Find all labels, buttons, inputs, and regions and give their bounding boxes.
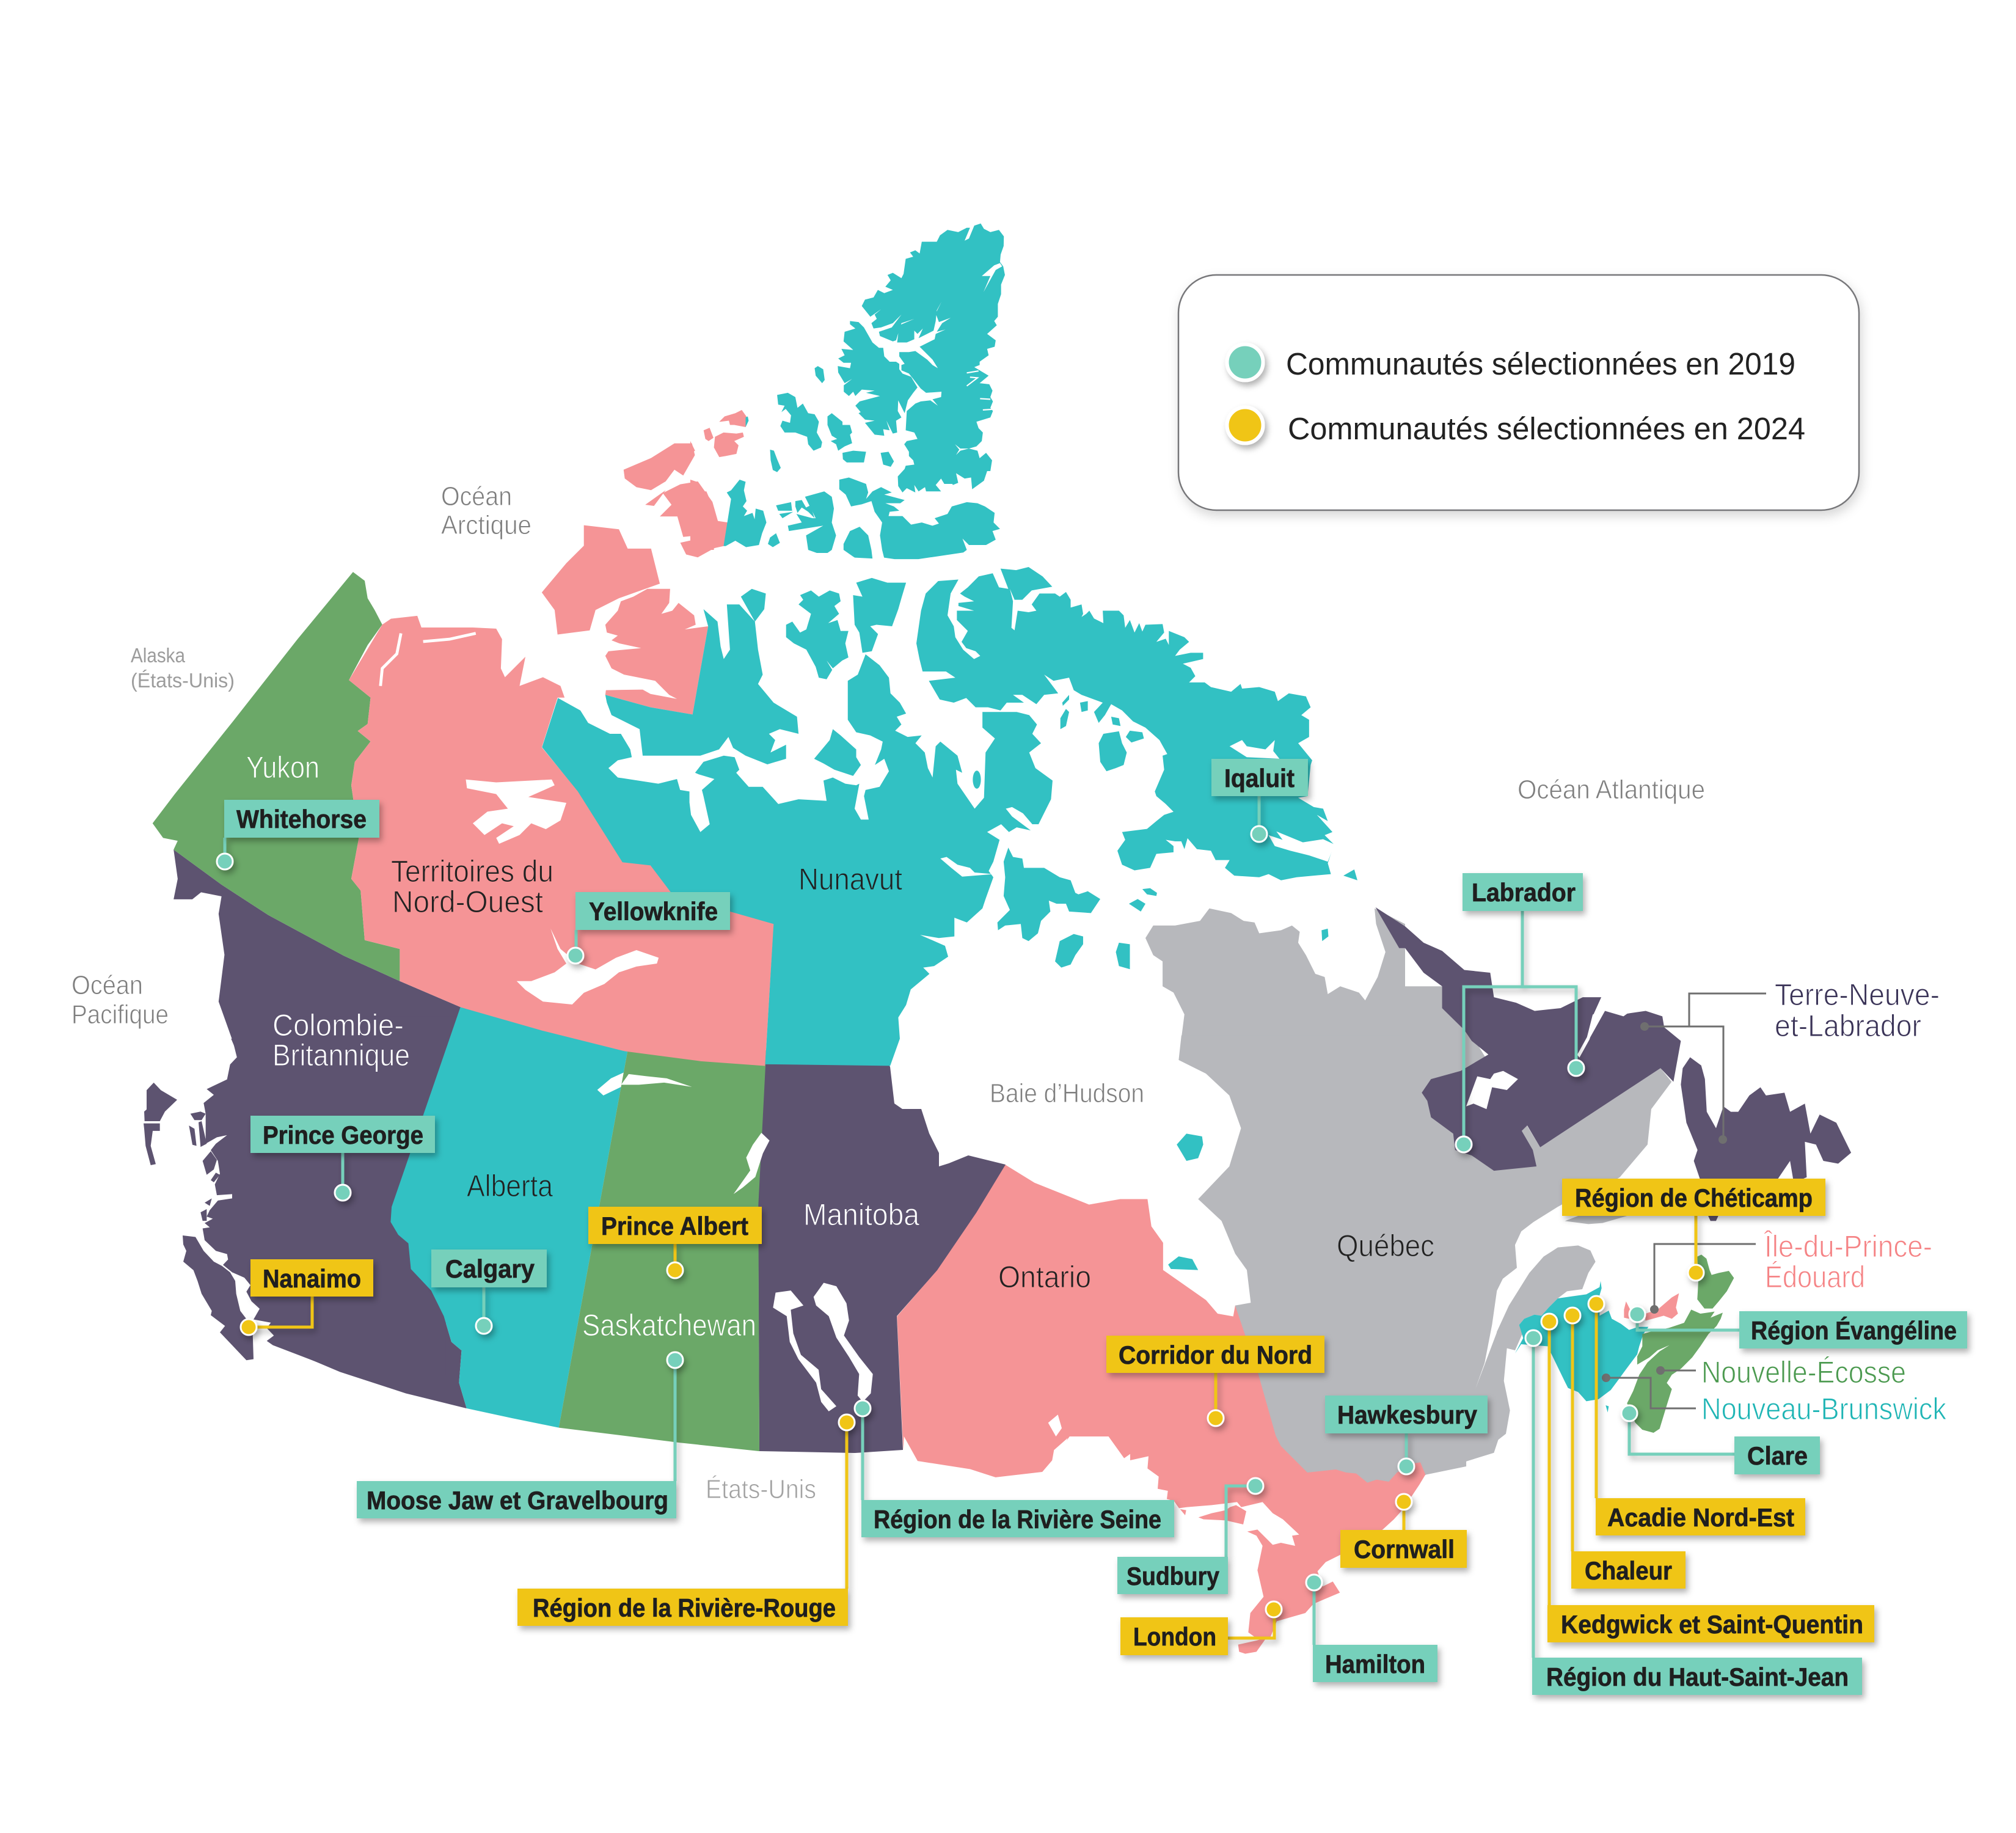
province name: Colombie-Britannique: Britannique (272, 1038, 410, 1072)
province: Manitoba (758, 1054, 1006, 1453)
community label: Calgary (431, 1249, 547, 1287)
province name: Nouvelle-Écosse: Nouvelle-Écosse (1701, 1355, 1906, 1389)
province name: Saskatchewan: Saskatchewan (582, 1308, 756, 1342)
community label: Corridor du Nord: Corridor du Nord (1119, 1341, 1312, 1369)
province: Ontario (897, 1165, 1425, 1654)
teal leader lines (225, 796, 1739, 1658)
province name: Québec: Québec (1337, 1229, 1434, 1263)
province name: Alberta: Alberta (467, 1169, 553, 1203)
label: Alaska (États-Unis): Alaska (131, 644, 186, 667)
province name: Nouveau-Brunswick: Nouveau-Brunswick (1701, 1392, 1947, 1426)
province name: Manitoba: Manitoba (803, 1198, 919, 1232)
community dots: 2019 (217, 826, 1645, 1590)
label: Alaska (États-Unis): (États-Unis) (131, 669, 235, 692)
province: Île-du-Prince-Édouard (1624, 1293, 1679, 1321)
province: Saskatchewan (559, 1033, 770, 1451)
community label: Nanaimo: Nanaimo (263, 1264, 361, 1293)
label: Océan Pacifique: Pacifique (71, 1000, 169, 1030)
legend marker: 2019 (1227, 345, 1263, 380)
province: Nouveau-Brunswick (1515, 1281, 1648, 1413)
legend text: 2019: Communautés sélectionnées en 2019 (1286, 346, 1795, 381)
community label: Labrador: Labrador (1472, 878, 1576, 907)
community label: Hawkesbury: Hawkesbury (1337, 1400, 1478, 1429)
community label: Région Évangéline: Région Évangéline (1751, 1316, 1957, 1345)
community label: Région du Haut-Saint-Jean: Région du Haut-Saint-Jean (1546, 1663, 1849, 1691)
community dots: 2024 (241, 1262, 1704, 1617)
community label: Région de la Rivière-Rouge: Région de la Rivière-Rouge (533, 1593, 836, 1622)
community label: Whitehorse: Whitehorse (236, 805, 367, 833)
community label: London (1120, 1617, 1228, 1655)
yellow leader lines (249, 1216, 1696, 1638)
community label: Région de Chéticamp: Région de Chéticamp (1575, 1184, 1813, 1212)
province name: Ontario: Ontario (998, 1260, 1091, 1294)
province name: Terre-Neuve-et-Labrador: Terre-Neuve- (1775, 978, 1940, 1012)
gray leader lines for Atlantic provinces (1602, 993, 1766, 1408)
province name: Île-du-Prince-Édouard: Île-du-Prince- (1763, 1229, 1932, 1264)
province: Québec (1145, 909, 1671, 1510)
community label: Sudbury: Sudbury (1127, 1562, 1220, 1590)
province name: Nunavut: Nunavut (798, 862, 902, 896)
province: Terre-Neuve-et-Labrador (1376, 907, 1851, 1221)
province name: Territoires du Nord-Ouest: Nord-Ouest (392, 885, 543, 919)
province: Nouvelle-Écosse (1627, 1254, 1734, 1433)
community label: Calgary: Calgary (445, 1254, 535, 1283)
community label: Yellowknife: Yellowknife (589, 897, 718, 926)
label: Océan Arctique: Océan (441, 481, 512, 511)
community label: Yellowknife (575, 892, 730, 930)
province name: Terre-Neuve-et-Labrador: et-Labrador (1775, 1009, 1921, 1043)
province: Yukon (153, 572, 400, 981)
label: Océan Atlantique: Océan Atlantique (1517, 775, 1705, 805)
community label: Chaleur (1571, 1551, 1685, 1589)
label: Océan Pacifique: Océan (71, 970, 143, 1000)
community label: Whitehorse (224, 800, 379, 838)
community label: Clare: Clare (1747, 1441, 1808, 1470)
community label: Prince George: Prince George (263, 1121, 423, 1149)
community label: Clare (1734, 1436, 1820, 1474)
label: Océan Arctique: Arctique (441, 510, 531, 540)
province name: Territoires du Nord-Ouest: Territoires du (391, 854, 553, 888)
community label: Iqaluit: Iqaluit (1224, 764, 1295, 792)
community label: Cornwall: Cornwall (1354, 1535, 1455, 1564)
panel: legend (1178, 275, 1859, 510)
community label: Moose Jaw et Gravelbourg: Moose Jaw et Gravelbourg (367, 1486, 668, 1515)
community label: Hawkesbury (1325, 1396, 1488, 1433)
community label: Région de la Rivière Seine: Région de la Rivière Seine (874, 1505, 1161, 1534)
province: Colombie-Britannique (144, 850, 467, 1408)
province: Alberta (390, 990, 692, 1428)
label: Baie d'Hudson: Baie d’Hudson (990, 1078, 1144, 1108)
community label: Iqaluit (1211, 759, 1308, 796)
community label: Acadie Nord-Est: Acadie Nord-Est (1607, 1503, 1794, 1532)
community label: Prince Albert: Prince Albert (601, 1212, 748, 1240)
province: Territoires du Nord-Ouest (349, 410, 774, 1066)
community label: Région Évangéline (1739, 1311, 1967, 1348)
legend text: 2024: Communautés sélectionnées en 2024 (1288, 411, 1805, 446)
community label: Sudbury (1117, 1557, 1228, 1594)
community label: Hamilton (1313, 1645, 1437, 1682)
province name: Yukon: Yukon (246, 750, 320, 785)
province: Nunavut (542, 224, 1357, 1270)
community label: Chaleur: Chaleur (1585, 1556, 1672, 1585)
community label: Cornwall (1340, 1530, 1467, 1568)
province name: Île-du-Prince-Édouard: Édouard (1765, 1260, 1865, 1294)
label: États-Unis: États-Unis (706, 1474, 816, 1504)
province name: Colombie-Britannique: Colombie- (272, 1008, 404, 1042)
legend marker: 2024 (1227, 407, 1263, 444)
community label: London: London (1133, 1622, 1216, 1651)
community label: Nanaimo (250, 1259, 373, 1297)
community label: Kedgwick et Saint-Quentin: Kedgwick et Saint-Quentin (1561, 1610, 1863, 1639)
community label: Hamilton: Hamilton (1325, 1650, 1425, 1678)
